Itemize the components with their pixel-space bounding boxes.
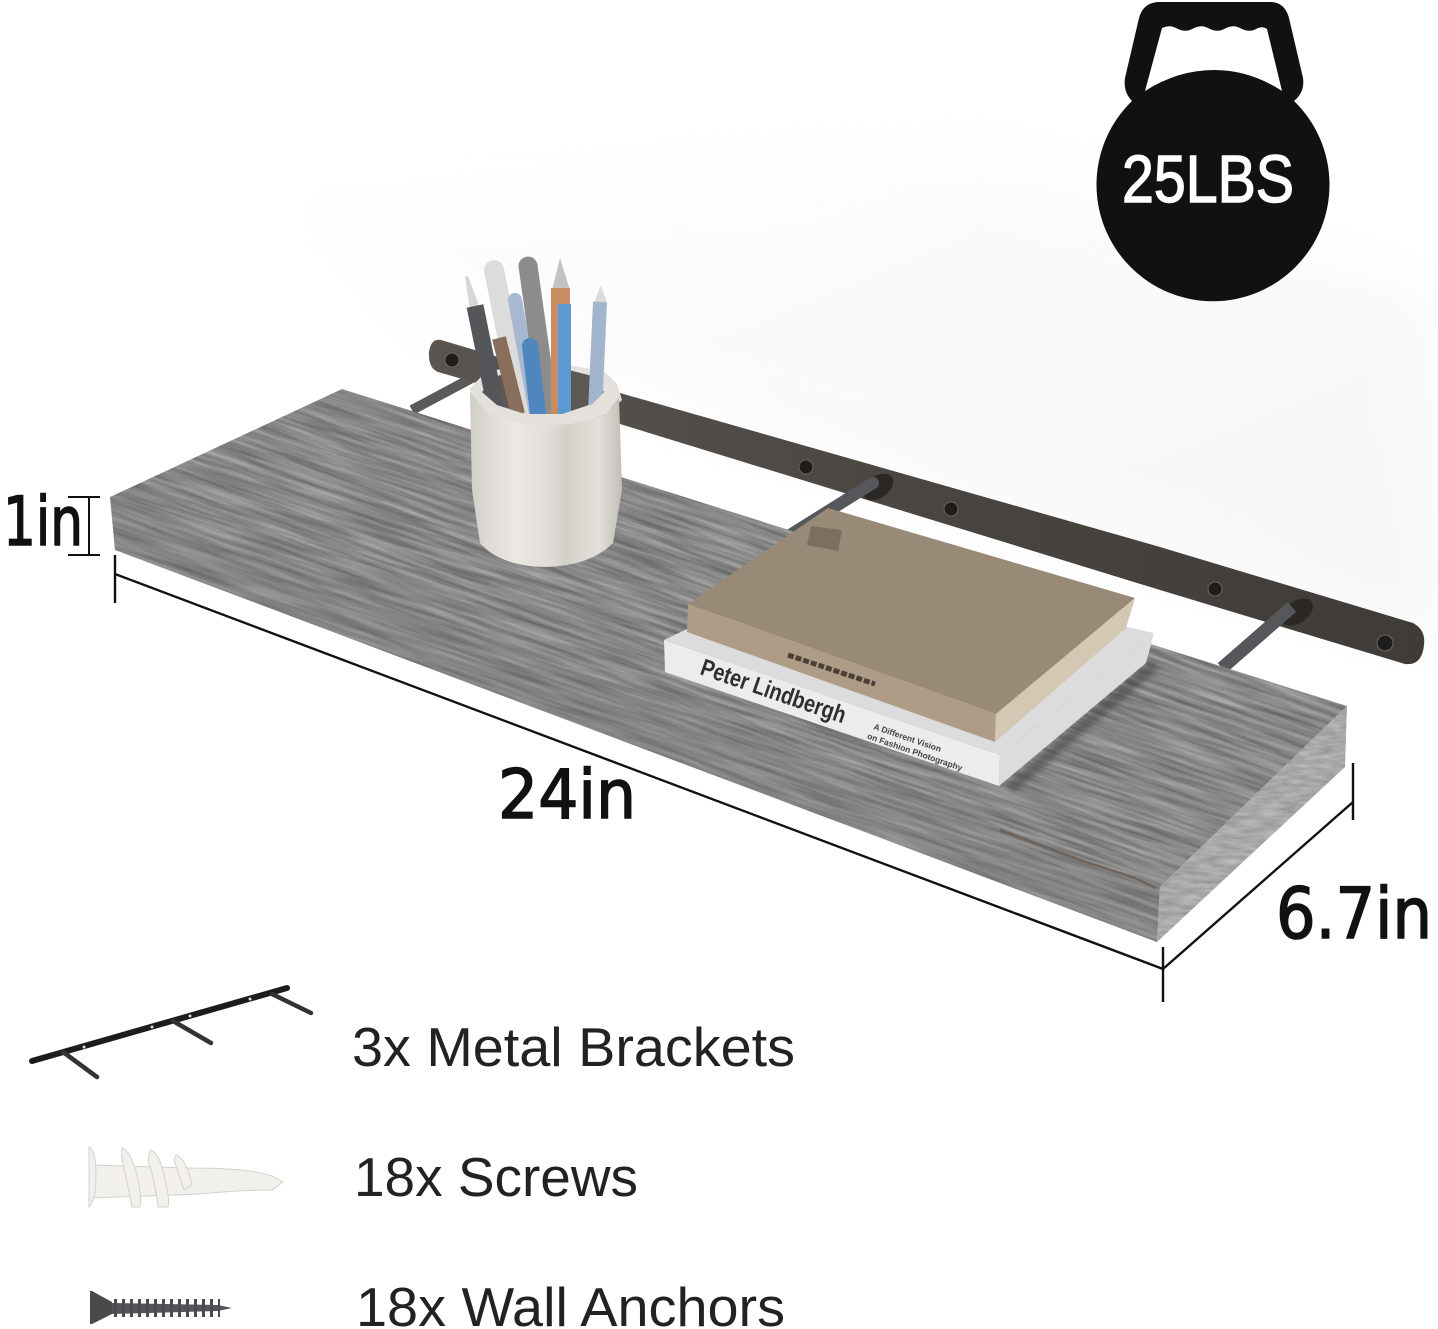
dimension: depth 6.7in — [1163, 763, 1432, 969]
bracket screws — [445, 353, 1393, 651]
book shadow — [1005, 660, 1160, 792]
upper book: spine — [687, 604, 996, 742]
stacked books — [664, 508, 1160, 792]
kettlebell — [1096, 2, 1330, 301]
rod: left — [412, 378, 472, 410]
weight capacity icon — [1096, 2, 1330, 301]
height label: 1in — [3, 483, 83, 562]
shelf end grain — [1157, 706, 1347, 942]
cup body — [470, 392, 622, 567]
pen: light blue — [515, 300, 536, 414]
wall shadow — [260, 150, 1438, 640]
pen: pale blue right — [594, 285, 607, 412]
upper book: top — [688, 508, 1135, 714]
shelf support rods and wall bracket — [412, 340, 1424, 668]
book title: Peter Lindbergh — [697, 654, 850, 729]
part label: metal brackets: 3x Metal Brackets — [352, 1016, 795, 1078]
dimension: height 1in — [3, 483, 100, 562]
spine title mark — [788, 655, 875, 684]
pen: dark grey — [465, 276, 497, 414]
rod: right — [1222, 593, 1318, 668]
cup rim — [470, 365, 622, 425]
pen: brown — [499, 338, 518, 414]
length label: 24in — [498, 756, 636, 835]
rod: middle — [790, 468, 898, 535]
shelf top and front: wood grain — [110, 389, 1347, 942]
pencil: orange and blue — [551, 258, 571, 416]
dimension: length 24in — [115, 555, 1163, 1002]
book subtitle: A Different Vision — [872, 721, 943, 754]
depth marker — [1163, 763, 1353, 969]
pen: blue — [530, 346, 538, 414]
pen: translucent white — [494, 270, 522, 410]
part: screw icon — [90, 1291, 232, 1324]
worn edge — [1000, 830, 1156, 888]
pen: grey — [528, 266, 549, 414]
weight label: 25LBS — [1122, 142, 1294, 217]
shelf — [110, 389, 1347, 942]
upper book: pages — [995, 598, 1135, 742]
cup inner — [482, 369, 604, 414]
book subtitle: on Fashion Photography — [866, 731, 964, 773]
part: metal bracket icon — [32, 988, 311, 1077]
lower book: cover — [664, 640, 1000, 786]
pens — [465, 258, 607, 416]
part label: screws: 18x Screws — [354, 1146, 638, 1208]
lower book: top — [664, 560, 1154, 755]
part: wall anchor icon — [89, 1147, 283, 1207]
bracket bar — [429, 340, 1424, 664]
lower book: pages — [999, 633, 1154, 786]
shelf front face shading — [110, 497, 1160, 942]
length marker — [115, 555, 1163, 1002]
height marker — [68, 497, 100, 555]
pen cup with pens — [465, 258, 622, 567]
barcode — [807, 526, 842, 551]
